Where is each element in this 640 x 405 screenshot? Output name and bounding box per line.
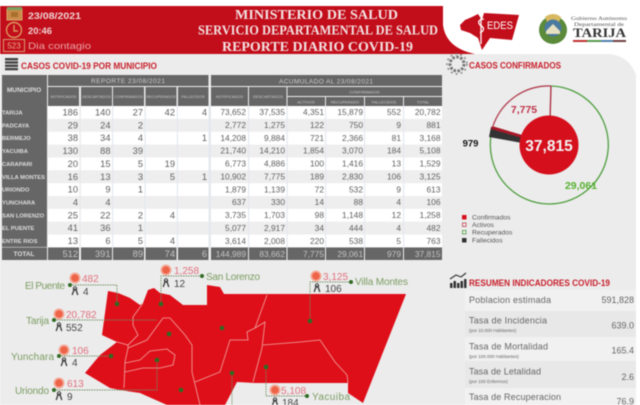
indicator: incidence <box>469 316 634 333</box>
indicator: lethality: (por 100 Enfermos) <box>469 379 508 384</box>
legend: Confirmados <box>472 214 511 222</box>
cumulative values: 1,703 <box>264 210 285 220</box>
cumulative values: 7,775 <box>303 249 324 259</box>
map label: San Lorenzo <box>160 264 260 290</box>
cumulative values: 73,652 <box>220 107 246 117</box>
daily values: 186 <box>62 108 78 118</box>
daily values: 36 <box>100 223 110 233</box>
cumulative values: 220 <box>310 236 324 246</box>
cumulative values: 106 <box>427 197 441 207</box>
daily values: 3 <box>138 172 143 182</box>
map label: Villa Montes: 3,125 <box>323 272 348 283</box>
daily values: 74 <box>165 249 175 259</box>
logo: Tarija government: Departamental de <box>574 22 625 28</box>
legend: Fallecidos <box>472 238 503 244</box>
daily values: 15 <box>100 159 110 169</box>
cumulative values: 14 <box>315 197 324 207</box>
map label: San Lorenzo: 12 <box>174 279 186 290</box>
cumulative values: 1,416 <box>342 158 363 168</box>
municipality column: YUNCHARA <box>2 200 36 206</box>
cumulative values: 2,917 <box>264 223 285 233</box>
cumulative values: 1,529 <box>420 158 441 168</box>
cumulative values: 14,210 <box>259 146 285 156</box>
cumulative values: 122 <box>310 120 324 130</box>
cumulative values: 3,168 <box>420 133 441 143</box>
logo: Tarija government: TARIJA <box>573 25 627 40</box>
daily values <box>62 108 207 259</box>
indicator: population: 591,828 <box>601 295 634 305</box>
daily values: 1 <box>138 223 143 233</box>
map label: El Puente: 4 <box>83 287 89 298</box>
cumulative values: 1,258 <box>420 210 441 220</box>
map label: Villa Montes <box>310 270 408 295</box>
cumulative values: 20,782 <box>415 107 441 117</box>
logo: SEDES: EDES <box>487 20 513 32</box>
map label: Yunchara: 106 <box>72 346 89 357</box>
cumulative values: 9,884 <box>264 133 285 143</box>
map label: Tarija <box>26 308 97 334</box>
logo: SEDES <box>460 13 519 50</box>
title: SERVICIO DEPARTAMENTAL DE SALUD <box>198 24 438 38</box>
municipality column: PADCAYA <box>2 123 30 129</box>
daily values: 13 <box>68 236 78 246</box>
cumulative values: 15,879 <box>337 107 363 117</box>
daily values: 89 <box>133 249 143 259</box>
municipality column: MUNICIPIO <box>7 87 41 94</box>
cumulative values: 12 <box>392 210 401 220</box>
cumulative values: 5,077 <box>225 223 246 233</box>
indicator: recovery <box>469 392 634 405</box>
map label: Yunchara: 4 <box>72 358 78 369</box>
cumulative report header: DESCARTADOS <box>253 94 283 99</box>
daily values: 88 <box>100 146 110 156</box>
map label: Uriondo: 9 <box>67 392 73 403</box>
cumulative values: 14,208 <box>220 133 246 143</box>
municipality column: TOTAL <box>13 251 35 258</box>
contagion day counter <box>4 40 24 52</box>
cumulative values: 3,125 <box>420 172 441 182</box>
contagion day counter: 523 <box>7 42 21 50</box>
cumulative values: 1,854 <box>303 146 324 156</box>
indicator: mortality: (por 100.000 Habitantes) <box>469 354 519 359</box>
cumulative values: 34 <box>315 223 324 233</box>
daily values: 1 <box>138 185 143 195</box>
daily values: 130 <box>62 146 78 156</box>
cumulative values: 3,614 <box>225 236 246 246</box>
daily report header <box>48 75 208 106</box>
total row bars <box>48 248 442 260</box>
cumulative values: 4 <box>396 197 401 207</box>
daily report header: CONFIRMADOS <box>114 95 143 99</box>
cumulative values: 444 <box>349 223 363 233</box>
daily values: 5 <box>138 159 143 169</box>
cumulative values: 37,535 <box>259 107 285 117</box>
daily values: 16 <box>68 172 78 182</box>
cumulative values: 106 <box>387 172 401 182</box>
daily values: 29 <box>68 120 78 130</box>
cumulative values: 4,351 <box>303 107 324 117</box>
cumulative values: 3,735 <box>225 210 246 220</box>
map label: El Puente <box>25 272 99 298</box>
logo: Tarija government: Gobierno Autónomo <box>571 16 627 22</box>
municipality column: SAN LORENZO <box>2 213 45 219</box>
cumulative values: 538 <box>349 236 363 246</box>
map label: Villa Montes: Villa Montes <box>355 277 408 288</box>
legend <box>462 214 513 244</box>
cumulative values: 100 <box>310 158 324 168</box>
cumulative values: 2,772 <box>225 120 246 130</box>
indicator: incidence: Tasa de Incidencia <box>469 316 547 326</box>
indicator: mortality: 165.4 <box>611 346 634 356</box>
logo: Tarija government <box>539 14 627 44</box>
municipality column: URIONDO <box>2 188 30 194</box>
daily values: 4 <box>170 210 175 220</box>
map label: Uriondo: 613 <box>67 379 84 390</box>
daily values: 2 <box>138 210 143 220</box>
leader lines <box>54 276 351 405</box>
daily values: 5 <box>170 172 175 182</box>
daily values: 42 <box>165 108 175 118</box>
municipality column: YACUIBA <box>2 149 29 155</box>
map label: El Puente: 482 <box>82 274 99 285</box>
cumulative values: 29,061 <box>337 249 363 259</box>
cumulative values: 9 <box>396 120 401 130</box>
cumulative report header <box>211 75 442 106</box>
cumulative report header: FALLECIDOS <box>372 100 397 104</box>
cumulative values: 482 <box>427 223 441 233</box>
daily report header: REPORTE 23/08/2021 <box>91 78 165 85</box>
icon: clock <box>6 22 22 38</box>
daily values: 24 <box>100 120 110 130</box>
cumulative report header: RECUPERADO <box>331 100 359 104</box>
legend: Activos <box>472 222 495 229</box>
donut chart: confirmed cases: 29,061 <box>565 180 597 192</box>
municipality column: CARAPARI <box>2 162 33 168</box>
map label: Uriondo: Uriondo <box>15 386 49 397</box>
map label: Yacuiba: 5,108 <box>281 386 306 397</box>
municipality column <box>2 75 47 260</box>
cumulative values: 613 <box>427 184 441 194</box>
cumulative values: 1,139 <box>264 184 285 194</box>
cumulative values: 7,775 <box>264 172 285 182</box>
daily values: 6 <box>202 249 207 259</box>
daily values: 39 <box>133 146 143 156</box>
map label: Tarija: 552 <box>66 323 83 334</box>
cumulative values <box>216 107 441 259</box>
cumulative values: 3,070 <box>342 146 363 156</box>
cumulative values: 9 <box>396 184 401 194</box>
cumulative values: 184 <box>387 146 401 156</box>
heading: cases by municipality: CASOS COVID-19 POR MUNICIPIO <box>21 61 157 71</box>
cumulative values: 763 <box>427 236 441 246</box>
indicator: mortality <box>469 342 634 359</box>
map label: El Puente: El Puente <box>25 281 65 292</box>
title: MINISTERIO DE SALUD <box>235 8 398 23</box>
daily report header: RECUPERADOS <box>146 95 176 99</box>
daily values: 4 <box>105 198 110 208</box>
daily values: 10 <box>68 185 78 195</box>
icon: virus <box>447 54 467 74</box>
cumulative values: 4 <box>396 223 401 233</box>
cumulative values: 5,108 <box>420 146 441 156</box>
municipality column: ENTRE RIOS <box>2 239 38 245</box>
daily values: 4 <box>73 198 78 208</box>
cumulative values: 1,879 <box>225 184 246 194</box>
map label: Yacuiba: Yacuiba <box>312 392 350 403</box>
map label: Tarija: 20,782 <box>66 310 97 321</box>
cumulative values: 2,830 <box>342 172 363 182</box>
donut chart: confirmed cases <box>463 86 608 204</box>
cumulative values: 81 <box>392 133 401 143</box>
indicator: incidence: (por 10.000 Habitantes) <box>469 328 517 333</box>
daily values: 13 <box>100 172 110 182</box>
title: REPORTE DIARIO COVID-19 <box>222 40 413 55</box>
daily values: 4 <box>138 133 143 143</box>
map label: San Lorenzo: San Lorenzo <box>206 272 260 283</box>
cumulative values: 2,008 <box>264 236 285 246</box>
map: Tarija department <box>52 274 406 405</box>
daily values: 512 <box>62 249 78 259</box>
cumulative report header: TOTAL <box>417 100 430 104</box>
icon: table <box>5 58 18 70</box>
time: 20:46 <box>28 26 52 37</box>
cumulative values: 83,662 <box>259 249 285 259</box>
map label: San Lorenzo: 1,258 <box>174 266 199 277</box>
daily values: 2 <box>138 120 143 130</box>
cumulative values: 552 <box>387 107 401 117</box>
date: 23/08/2021 <box>28 11 82 22</box>
daily values: 1 <box>202 133 207 143</box>
daily values: 38 <box>68 133 78 143</box>
cumulative values: 532 <box>349 184 363 194</box>
title <box>198 8 438 55</box>
donut chart: confirmed cases: 37,815 <box>525 138 573 155</box>
municipality column: TARIJA <box>2 110 23 116</box>
map label: Uriondo <box>15 378 84 403</box>
cumulative values: 637 <box>232 197 246 207</box>
header band <box>0 6 475 55</box>
cumulative values: 750 <box>349 120 363 130</box>
cumulative report header: ACUMULADO AL 23/08/2021 <box>279 78 373 86</box>
municipality column: BERMEJO <box>2 136 31 142</box>
contagion day label: Dia contagio <box>28 41 91 52</box>
indicator: lethality <box>469 366 634 384</box>
indicator: population: Poblacion estimada <box>469 295 551 305</box>
cumulative values: 10,902 <box>220 172 246 182</box>
cumulative report header: ACTIVOS <box>297 100 315 104</box>
cumulative values: 88 <box>354 197 363 207</box>
indicator: mortality: Tasa de Mortalidad <box>469 342 548 352</box>
cumulative values: 721 <box>310 133 324 143</box>
daily report header: NOTIFICADOS <box>51 95 77 99</box>
donut chart: confirmed cases: 979 <box>463 138 478 150</box>
daily values: 4 <box>202 108 207 118</box>
cumulative values: 881 <box>427 120 441 130</box>
daily values: 34 <box>100 133 110 143</box>
daily values: 4 <box>170 236 175 246</box>
cumulative values: 5 <box>396 236 401 246</box>
indicator: lethality: Tasa de Letalidad <box>469 366 541 376</box>
daily values: 27 <box>133 108 143 118</box>
daily report header: DESCARTADOS <box>82 95 111 99</box>
cumulative report header: NOTIFICADOS <box>216 94 243 99</box>
map label: Villa Montes: 106 <box>325 284 342 295</box>
cumulative values: 72 <box>315 184 324 194</box>
daily values: 41 <box>68 223 78 233</box>
map label: Yunchara: Yunchara <box>11 352 54 363</box>
legend: Recuperados <box>472 230 513 236</box>
heading: indicators summary: RESUMEN INDICADORES COVID-19 <box>469 278 610 289</box>
indicator: recovery: Tasa de Recuperacion <box>469 392 561 402</box>
daily values: 20 <box>68 159 78 169</box>
cumulative values: 2,366 <box>342 133 363 143</box>
indicator: incidence: 639.0 <box>611 320 634 330</box>
panel: indicators summary <box>465 290 636 405</box>
indicator: population <box>469 295 634 305</box>
municipality column: EL PUENTE <box>2 226 35 232</box>
cumulative values: 21,740 <box>220 146 246 156</box>
daily values: 25 <box>68 210 78 220</box>
daily values: 9 <box>105 185 110 195</box>
cumulative values: 98 <box>315 210 324 220</box>
cumulative values: 13 <box>392 158 401 168</box>
cumulative values: 189 <box>310 172 324 182</box>
daily values: 1 <box>202 172 207 182</box>
cumulative values: 144,989 <box>216 249 246 259</box>
donut chart: confirmed cases: 7,775 <box>511 104 537 116</box>
table: cases by municipality <box>2 75 442 260</box>
daily values: 22 <box>100 210 110 220</box>
cumulative values: 979 <box>387 249 401 259</box>
daily values: 391 <box>95 249 110 259</box>
cumulative values: 330 <box>271 197 285 207</box>
map label: Yunchara <box>11 344 89 369</box>
map label: Yacuiba <box>270 384 350 405</box>
daily values: 140 <box>95 108 110 118</box>
cumulative values: 4,886 <box>264 158 285 168</box>
cumulative values: 6,773 <box>225 158 246 168</box>
icon: bar chart trend <box>450 273 466 288</box>
daily report header: FALLECIDOS <box>181 95 205 99</box>
cumulative values: 37,815 <box>415 249 441 259</box>
heading: confirmed cases: CASOS CONFIRMADOS <box>469 60 561 72</box>
map label: Tarija: Tarija <box>26 316 49 327</box>
municipality column: VILLA MONTES <box>2 175 45 181</box>
cumulative values: 1,148 <box>342 210 363 220</box>
cumulative report header: CONFIRMADOS <box>350 90 380 94</box>
indicator: lethality: 2.6 <box>621 372 634 382</box>
daily values: 6 <box>105 236 110 246</box>
daily values: 19 <box>165 159 175 169</box>
cumulative values: 1,275 <box>264 120 285 130</box>
icon: calendar <box>7 7 22 20</box>
daily values: 5 <box>138 236 143 246</box>
